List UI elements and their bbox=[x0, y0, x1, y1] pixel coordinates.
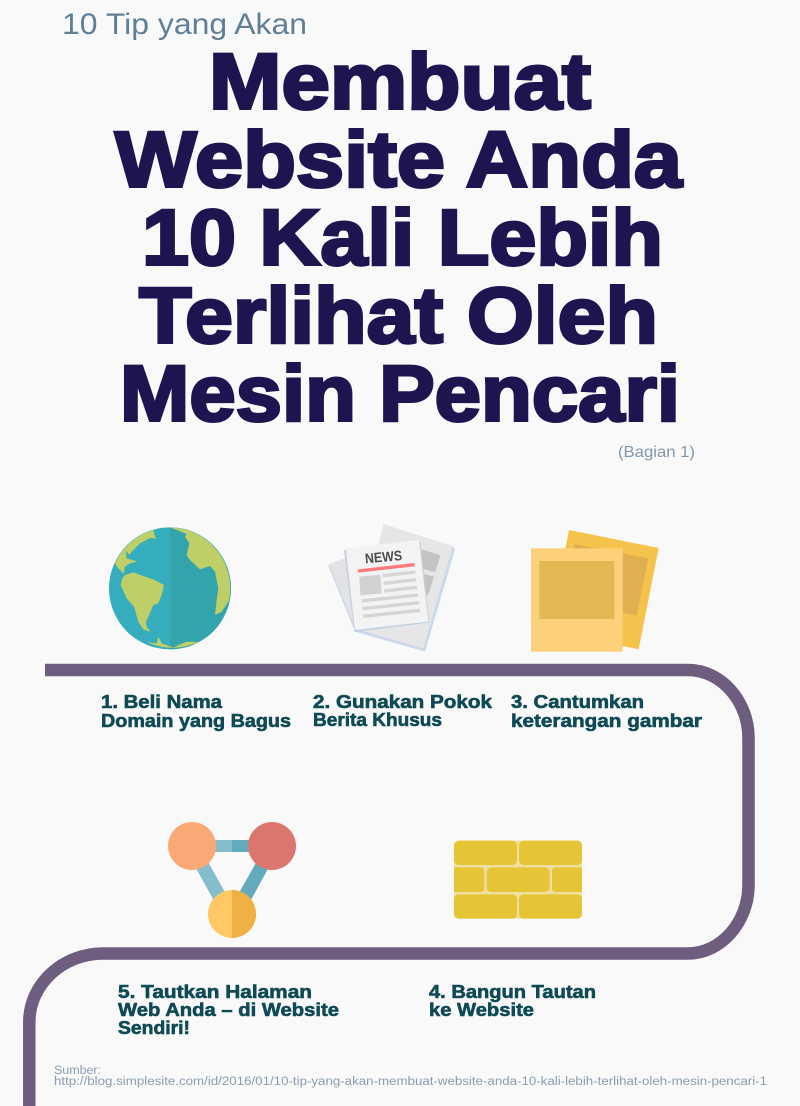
title: 10 Kali Lebih bbox=[142, 192, 663, 282]
label: tip 1: Domain yang Bagus bbox=[101, 710, 291, 731]
icon: newspaper: NEWS bbox=[364, 547, 403, 566]
label: tip 3: keterangan gambar bbox=[511, 710, 702, 731]
icon: globe bbox=[109, 527, 231, 649]
icon: brick wall bbox=[454, 841, 582, 919]
label: tip 1: 1. Beli Nama bbox=[101, 691, 223, 712]
subtitle: 10 Tip yang Akan bbox=[62, 8, 307, 41]
title: Terlihat Oleh bbox=[139, 270, 658, 360]
label: tip 4 bbox=[429, 981, 596, 1020]
icon: photos bbox=[531, 530, 659, 652]
source credit: http://blog.simplesite.com/id/2016/01/10-tip-yang-akan-membuat-website-anda-10-kali-lebih-terlihat-oleh-mesin-pencari-1 bbox=[54, 1076, 767, 1088]
icon: linked nodes bbox=[168, 822, 296, 938]
icon: newspaper bbox=[328, 524, 455, 652]
label: tip 2 bbox=[313, 691, 493, 730]
label: tip 3: 3. Cantumkan bbox=[511, 691, 644, 712]
label: tip 2: 2. Gunakan Pokok bbox=[313, 691, 493, 712]
label: tip 2: Berita Khusus bbox=[313, 709, 442, 730]
title: Mesin Pencari bbox=[120, 348, 680, 438]
part label: (Bagian 1) bbox=[618, 444, 695, 461]
title bbox=[115, 36, 683, 438]
label: tip 4: 4. Bangun Tautan bbox=[429, 981, 596, 1002]
source credit bbox=[54, 1065, 767, 1088]
label: tip 5: 5. Tautkan Halaman bbox=[118, 981, 312, 1002]
label: tip 5 bbox=[118, 981, 339, 1038]
label: tip 3 bbox=[511, 691, 702, 731]
label: tip 1 bbox=[101, 691, 291, 731]
timeline path bbox=[29, 670, 749, 1106]
source credit: Sumber: bbox=[54, 1065, 101, 1077]
label: tip 5: Sendiri! bbox=[118, 1017, 190, 1038]
title: Website Anda bbox=[115, 114, 683, 204]
label: tip 5: Web Anda – di Website bbox=[118, 999, 339, 1020]
label: tip 4: ke Website bbox=[429, 999, 534, 1020]
title: Membuat bbox=[209, 36, 591, 126]
